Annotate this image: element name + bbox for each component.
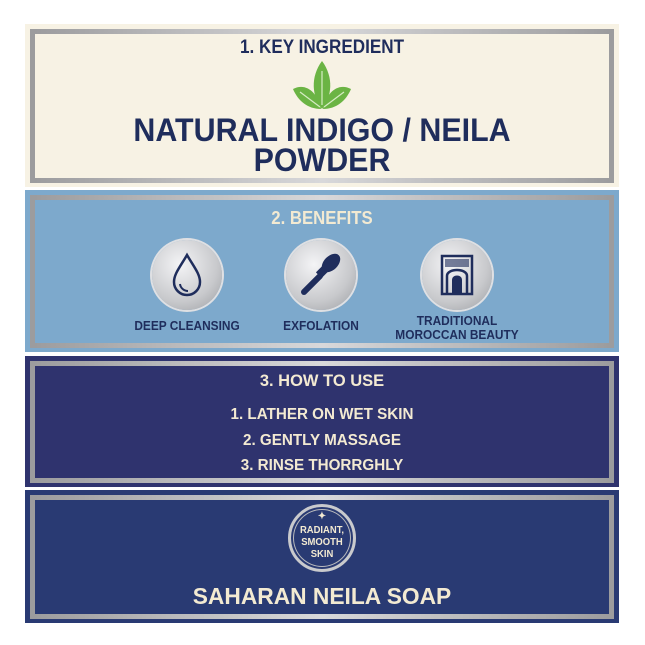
steps list: 3. RINSE THORRGHLY — [241, 457, 403, 474]
heading: key ingredient: 1. KEY INGREDIENT — [240, 37, 404, 58]
heading: benefits: 2. BENEFITS — [271, 208, 373, 228]
title: natural indigo / neila powder: NATURAL INDIGO / NEILA — [133, 112, 511, 148]
panel: how to use — [25, 356, 619, 487]
steps list: 1. LATHER ON WET SKIN — [231, 406, 413, 423]
title: natural indigo / neila powder — [133, 112, 511, 178]
badge: radiant smooth skin: RADIANT, — [300, 524, 344, 536]
label: deep cleansing: DEEP CLEANSING — [134, 319, 240, 333]
badge: radiant smooth skin — [288, 504, 356, 572]
label: traditional moroccan beauty — [395, 314, 519, 342]
badge: radiant smooth skin: SMOOTH — [301, 536, 343, 548]
label: traditional moroccan beauty: TRADITIONAL — [417, 314, 497, 328]
title: natural indigo / neila powder: POWDER — [254, 142, 390, 178]
steps list: 2. GENTLY MASSAGE — [243, 432, 401, 448]
icon: water drop — [152, 240, 222, 310]
icon: brush — [286, 240, 356, 310]
icon: leaves — [293, 61, 351, 109]
panel: key ingredient — [25, 24, 619, 187]
label: exfolation: EXFOLATION — [283, 319, 359, 333]
title: saharan neila soap: SAHARAN NEILA SOAP — [193, 583, 451, 609]
panel: benefits — [25, 190, 619, 352]
steps list — [231, 406, 413, 474]
badge: radiant smooth skin: ✦ — [318, 511, 326, 522]
badge: radiant smooth skin: SKIN — [311, 548, 333, 560]
panel: product — [25, 490, 619, 623]
label: traditional moroccan beauty: MOROCCAN BEAUTY — [395, 328, 519, 342]
icon: moroccan arch — [422, 240, 492, 310]
heading: how to use: 3. HOW TO USE — [260, 371, 384, 390]
